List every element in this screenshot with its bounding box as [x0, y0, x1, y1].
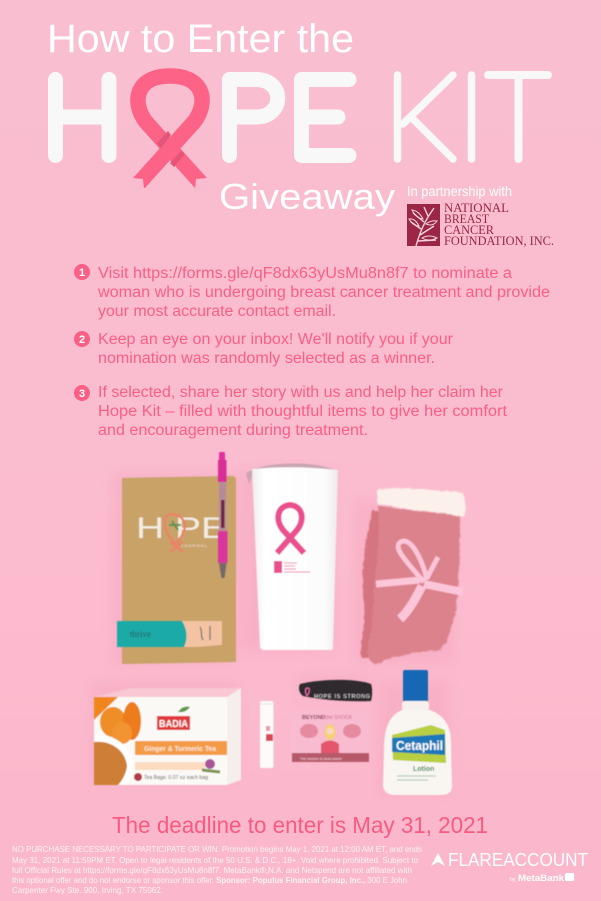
letter P [230, 80, 278, 156]
metabank byline: by [510, 877, 516, 883]
icon: leaf square [407, 204, 440, 246]
journal [122, 476, 236, 664]
socks cuff [377, 488, 465, 517]
wristband: HOPE IS STRONG [314, 694, 370, 700]
step 3 text [98, 384, 508, 439]
tea box top [94, 688, 241, 697]
socks ribbon bow [376, 541, 463, 619]
deadline: The deadline to enter is May 31, 2021 [112, 812, 488, 838]
cetaphil lotion: Cetaphil [396, 739, 443, 753]
card [292, 711, 369, 762]
journal sublabel: JOURNAL [181, 543, 208, 548]
step 1 text: woman who is undergoing breast cancer treatment and provide [97, 284, 550, 301]
tumbler ribbon [277, 505, 304, 553]
photo: hope kit contents [92, 452, 465, 796]
card figure [324, 724, 336, 740]
card: BEYOND [302, 715, 326, 721]
card speech bubbles [300, 724, 318, 738]
heading: hope kit wordmark [56, 75, 548, 190]
fine print: Carpenter Fwy Ste. 900, Irving, TX 75062. [12, 886, 163, 895]
tea turmeric slices [94, 697, 118, 720]
pen [218, 452, 228, 578]
tea box [94, 688, 241, 785]
step 1 badge: 1 [79, 267, 85, 279]
flare account name: FLAREACCOUNT [448, 850, 588, 870]
logo: national breast cancer foundation [407, 201, 554, 248]
fine print: May 31, 2021 at 11:59PM ET. Open to legal residents of the 50 U.S. & D.C., 18+. Void where prohibited. Subject to [12, 856, 418, 865]
socks body [361, 488, 465, 664]
journal ribbon icon [164, 514, 185, 552]
fine print: NO PURCHASE NECESSARY TO PARTICIPATE OR WIN. Promotion begins May 1, 2021 at 12:00 AM ET, and ends [12, 845, 422, 854]
tea box front [94, 697, 227, 785]
letter H [56, 80, 109, 156]
wristband [299, 680, 372, 701]
step 2 badge [74, 331, 90, 347]
organisation name: FOUNDATION, INC. [444, 234, 554, 248]
card: The mission to beat cancer [300, 757, 343, 761]
cetaphil lotion [383, 670, 452, 795]
step 1 text: Visit https://forms.gle/qF8dx63yUsMu8n8f7 to nominate a [98, 265, 512, 282]
letter I [468, 75, 475, 159]
tea orange band [135, 741, 227, 755]
logo: flare account [431, 850, 588, 884]
title: how to enter the: How to Enter the [47, 17, 354, 61]
tea count: Tea Bags: 0.07 oz each bag [144, 775, 208, 781]
partnership label: In partnership with [407, 183, 512, 199]
lip balm [260, 701, 274, 768]
cetaphil lotion: Lotion [413, 766, 434, 773]
fine print [12, 845, 422, 895]
step 3 text: If selected, share her story with us and help her claim her [98, 384, 503, 401]
step 1 text [97, 265, 550, 320]
tea brand label [157, 716, 190, 730]
socks [361, 488, 465, 664]
tea flower [205, 759, 215, 769]
step 2 badge: 2 [79, 334, 85, 346]
journal wordmark: H PE [136, 512, 227, 545]
tea box side [227, 688, 241, 785]
organisation name: CANCER [444, 223, 495, 237]
heading: giveaway: Giveaway [219, 176, 395, 217]
tumbler body [252, 467, 338, 650]
step 3 badge: 3 [79, 388, 85, 400]
step 1 text: your most accurate contact email. [98, 303, 336, 320]
lotion tube box: thrive [130, 629, 151, 639]
step 1 badge [74, 264, 90, 280]
step 3 badge [74, 385, 90, 401]
organisation name: BREAST [444, 212, 489, 226]
step 3 text: and encouragement during treatment. [98, 422, 368, 439]
step 2 text: Keep an eye on your inbox! We'll notify you if your [98, 331, 453, 348]
step 2 [74, 331, 453, 367]
letter K [398, 75, 453, 159]
tea cup [94, 735, 134, 785]
organisation name [444, 201, 554, 248]
step 2 text [98, 331, 453, 367]
step 1 [74, 264, 550, 320]
tumbler lid [246, 463, 337, 484]
step 2 text: nomination was randomly selected as a winner. [98, 350, 435, 367]
letter E [302, 80, 349, 156]
shadows [92, 470, 454, 796]
tumbler [246, 463, 338, 650]
fine print: this optional offer and do not endorse or sponsor this offer. Sponsor: Populus Financial Group, Inc., 300 E John [12, 876, 407, 885]
cetaphil label [392, 725, 446, 763]
tumbler small logo [274, 561, 310, 573]
icon: flare triangle [431, 853, 445, 866]
card: the SHOCK [326, 715, 353, 721]
lotion tube box [117, 621, 222, 647]
ribbon logo [130, 76, 209, 190]
step 3 [74, 384, 508, 439]
fine print: full Official Rules at https://forms.gle/qF8dx63yUsMu8n8f7. MetaBank®,N.A. and Netspend are not affiliated with [12, 866, 412, 875]
step 3 text: Hope Kit – filled with thoughtful items to give her comfort [98, 403, 508, 420]
tea box: Ginger & Turmeric Tea [144, 746, 216, 753]
organisation name: NATIONAL [444, 201, 509, 215]
metabank byline: MetaBank [518, 873, 565, 884]
letter T [488, 75, 548, 159]
tea box: BADIA [159, 719, 188, 730]
